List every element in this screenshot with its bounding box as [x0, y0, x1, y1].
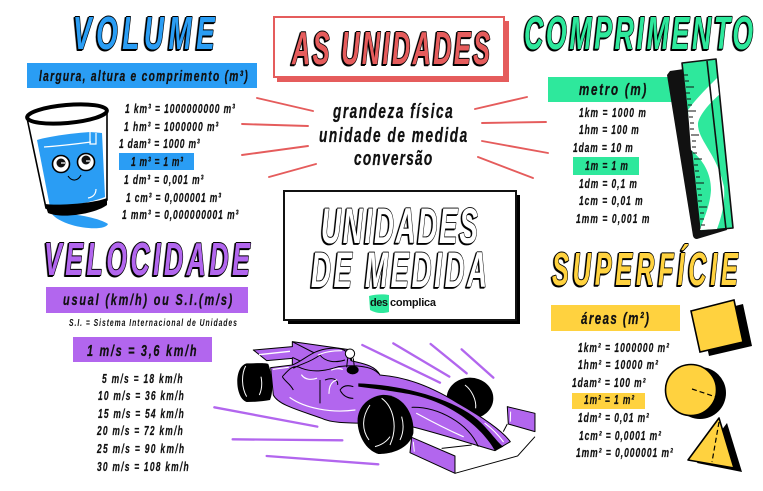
note: sistema internacional: S.I. = Sistema Internacional de Unidades [69, 317, 237, 328]
table: area conversions: 1cm² = 0,0001 m² [579, 429, 661, 444]
table: area conversions: 1dm² = 0,01 m² [578, 411, 649, 426]
logo: descomplica: des [370, 297, 388, 309]
text block: topics: unidade de medida [319, 124, 467, 147]
panel: main title box [284, 191, 520, 324]
heading: velocidade: VELOCIDADE [44, 233, 251, 285]
highlight: base unit length [573, 157, 639, 175]
text block: topics: conversão [354, 147, 432, 170]
icon: triangle [688, 418, 742, 472]
speed lines [214, 343, 493, 464]
table: area conversions: 1hm² = 10000 m² [578, 358, 658, 373]
icon: circle [666, 364, 726, 419]
rear right wheel [447, 378, 493, 419]
label: volume definition [27, 63, 257, 88]
table: volume conversions: 1 cm³ = 0,000001 m³ [126, 191, 221, 206]
heading: superficie: SUPERFÍCIE [552, 243, 739, 295]
text block: topics [319, 100, 467, 170]
car body [271, 348, 510, 451]
black stripe [358, 383, 503, 451]
icon: ruler [667, 59, 733, 239]
table: speed conversions: 5 m/s = 18 km/h [102, 372, 183, 387]
label: velocity units [46, 287, 248, 313]
panel: superficie [551, 243, 752, 472]
logo: descomplica: complica [390, 297, 437, 309]
heading: unidades de medida: DE MEDIDA [311, 241, 487, 298]
label: speed conversion: 1 m/s = 3,6 km/h [87, 342, 196, 360]
table: length conversions: 1m = 1 m [585, 159, 628, 174]
table: volume conversions: 1 hm³ = 1000000 m³ [124, 120, 219, 135]
label: areas: áreas (m²) [581, 310, 649, 329]
label: metro [548, 77, 672, 102]
rays around topics [242, 97, 548, 178]
table: speed conversions: 25 m/s = 90 km/h [96, 442, 184, 457]
heading: as unidades: AS UNIDADES [291, 22, 490, 74]
table: length conversions: 1dam = 10 m [573, 141, 633, 156]
table: volume conversions: 1 dm³ = 0,001 m³ [124, 173, 204, 188]
heading: unidades de medida [311, 197, 487, 298]
table: volume conversions: 1 km³ = 1000000000 m³ [125, 102, 235, 117]
table: volume conversions [119, 102, 239, 223]
panel: velocidade [44, 233, 251, 475]
label: speed conversion [73, 337, 212, 362]
table: area conversions: 1dam² = 100 m² [572, 376, 646, 391]
panel: volume [26, 9, 257, 228]
heading: unidades de medida: UNIDADES [321, 197, 478, 254]
table: speed conversions: 15 m/s = 54 km/h [98, 407, 184, 422]
table: area conversions: 1mm² = 0,000001 m² [576, 446, 673, 461]
table: length conversions: 1km = 1000 m [579, 106, 646, 121]
panel: comprimento [524, 7, 753, 239]
heading: comprimento: COMPRIMENTO [524, 7, 753, 59]
table: length conversions: 1cm = 0,01 m [579, 194, 643, 209]
rear wing [253, 342, 352, 367]
table: area conversions: 1m² = 1 m² [584, 393, 634, 408]
rear left wheel [237, 363, 272, 402]
front wheel [358, 395, 413, 454]
label: metro: metro (m) [579, 81, 646, 100]
text block: topics: grandeza física [332, 100, 453, 123]
table: volume conversions: 1 m³ = 1 m³ [131, 155, 183, 170]
table: speed conversions: 30 m/s = 108 km/h [97, 460, 189, 475]
table: speed conversions [96, 372, 189, 475]
table: speed conversions: 10 m/s = 36 km/h [98, 389, 184, 404]
icon: glass of water [26, 102, 108, 228]
icon: square [691, 300, 752, 356]
label: volume definition: largura, altura e comprimento (m³) [39, 67, 248, 85]
panel: as unidades title box [274, 17, 509, 82]
heading: volume: VOLUME [73, 9, 216, 60]
label: velocity units: usual (km/h) ou S.I.(m/s) [63, 291, 233, 309]
table: area conversions [572, 341, 673, 461]
logo: descomplica [369, 294, 437, 313]
table: length conversions: 1mm = 0,001 m [576, 212, 650, 227]
highlight: base unit volume [119, 153, 194, 170]
illustration: racing car [214, 342, 535, 473]
table: length conversions: 1dm = 0,1 m [579, 177, 637, 192]
table: volume conversions: 1 mm³ = 0,000000001 m³ [122, 208, 239, 223]
table: volume conversions: 1 dam³ = 1000 m³ [119, 137, 200, 152]
table: length conversions: 1hm = 100 m [579, 123, 639, 138]
highlight: base unit area [572, 393, 645, 409]
table: length conversions [573, 106, 650, 227]
front wing [442, 424, 535, 473]
table: speed conversions: 20 m/s = 72 km/h [96, 424, 183, 439]
driver helmet [347, 358, 354, 367]
table: area conversions: 1km² = 1000000 m² [578, 341, 669, 356]
label: areas [551, 305, 680, 331]
